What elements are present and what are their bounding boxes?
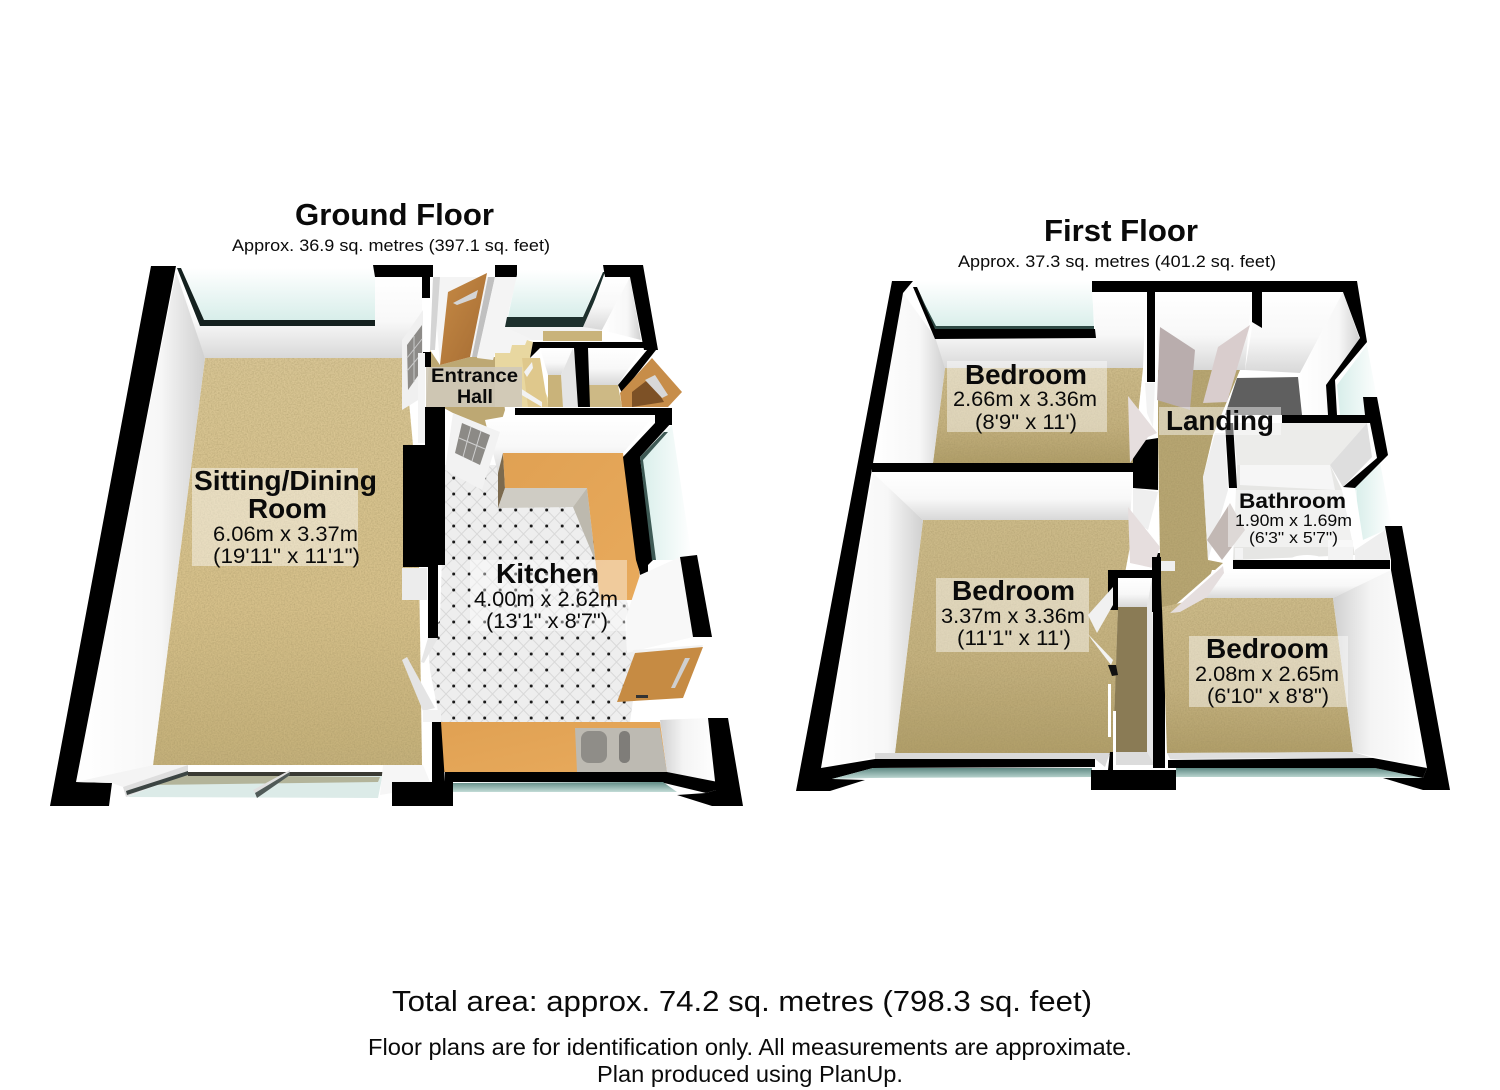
upper bedroom label: 2.66m x 3.36m: [953, 388, 1097, 411]
large bedroom label: [936, 575, 1089, 652]
front door: [440, 273, 487, 365]
kitchen sink worktop: [423, 710, 743, 806]
kitchen worktop: [503, 453, 643, 600]
kitchen label: [470, 558, 627, 633]
wardrobe closet: [1088, 553, 1165, 770]
right upper room: [1092, 281, 1380, 415]
footer disclaimer: Plan produced using PlanUp.: [597, 1061, 903, 1087]
large bedroom label: Bedroom: [952, 575, 1075, 606]
large bedroom: [796, 281, 1176, 791]
sliding patio doors: [76, 765, 453, 806]
ground floor heading: Approx. 36.9 sq. metres (397.1 sq. feet): [232, 236, 550, 255]
sitting/dining room label: Sitting/Dining: [194, 465, 377, 496]
footer disclaimer: [368, 1034, 1132, 1087]
large bedroom label: (11'1" x 11'): [957, 627, 1071, 650]
kitchen label: (13'1" x 8'7"): [486, 610, 608, 633]
first floor heading: Approx. 37.3 sq. metres (401.2 sq. feet): [958, 252, 1276, 271]
lower right bedroom label: (6'10" x 8'8"): [1207, 685, 1329, 708]
sitting/dining room label: [192, 465, 377, 568]
first floor heading: First Floor: [1044, 213, 1198, 248]
sitting room door: [402, 310, 423, 410]
entrance hall: [426, 265, 543, 432]
total area: Total area: approx. 74.2 sq. metres (798.3 sq. feet): [392, 986, 1092, 1018]
small closets: [505, 265, 658, 407]
entrance hall label: Hall: [457, 387, 493, 408]
upper bedroom label: (8'9" x 11'): [975, 411, 1077, 434]
sitting/dining room: [50, 265, 433, 806]
first floor plan: [796, 281, 1450, 791]
landing: [1154, 292, 1252, 613]
landing doors and walls: [1128, 383, 1175, 612]
bathroom label: [1228, 490, 1357, 547]
bathroom label: (6'3" x 5'7"): [1249, 530, 1338, 547]
ground floor heading: [232, 197, 550, 255]
ground floor heading: Ground Floor: [295, 197, 494, 232]
footer disclaimer: Floor plans are for identification only. All measurements are approximate.: [368, 1034, 1132, 1060]
kitchen: [428, 408, 712, 722]
bathroom label: Bathroom: [1239, 490, 1346, 513]
entrance hall label: Entrance: [431, 366, 518, 387]
ground floor plan: [50, 265, 743, 806]
lower right bedroom label: 2.08m x 2.65m: [1195, 663, 1339, 686]
side door: [620, 358, 682, 407]
sitting/dining room label: Room: [248, 493, 327, 524]
bathroom: [1207, 397, 1392, 569]
lower right bedroom label: Bedroom: [1206, 633, 1329, 664]
kitchen label: 4.00m x 2.62m: [474, 588, 618, 611]
landing label: Landing: [1166, 405, 1274, 436]
kitchen back door: [617, 645, 703, 702]
central wall: [402, 352, 445, 782]
bathroom label: 1.90m x 1.69m: [1235, 511, 1352, 530]
entrance hall label: [426, 366, 522, 408]
stairs: [495, 340, 552, 407]
lower right bedroom: [1162, 526, 1450, 790]
upper bedroom label: Bedroom: [965, 359, 1087, 390]
kitchen inner door: [445, 413, 500, 490]
kitchen label: Kitchen: [496, 558, 599, 589]
sitting/dining room label: (19'11" x 11'1"): [213, 545, 360, 568]
upper bedroom: [873, 281, 1146, 463]
first floor heading: [958, 213, 1276, 271]
large bedroom label: 3.37m x 3.36m: [941, 605, 1085, 628]
lower right bedroom label: [1189, 633, 1348, 708]
sitting/dining room label: 6.06m x 3.37m: [213, 523, 358, 546]
upper bedroom label: [947, 359, 1107, 434]
